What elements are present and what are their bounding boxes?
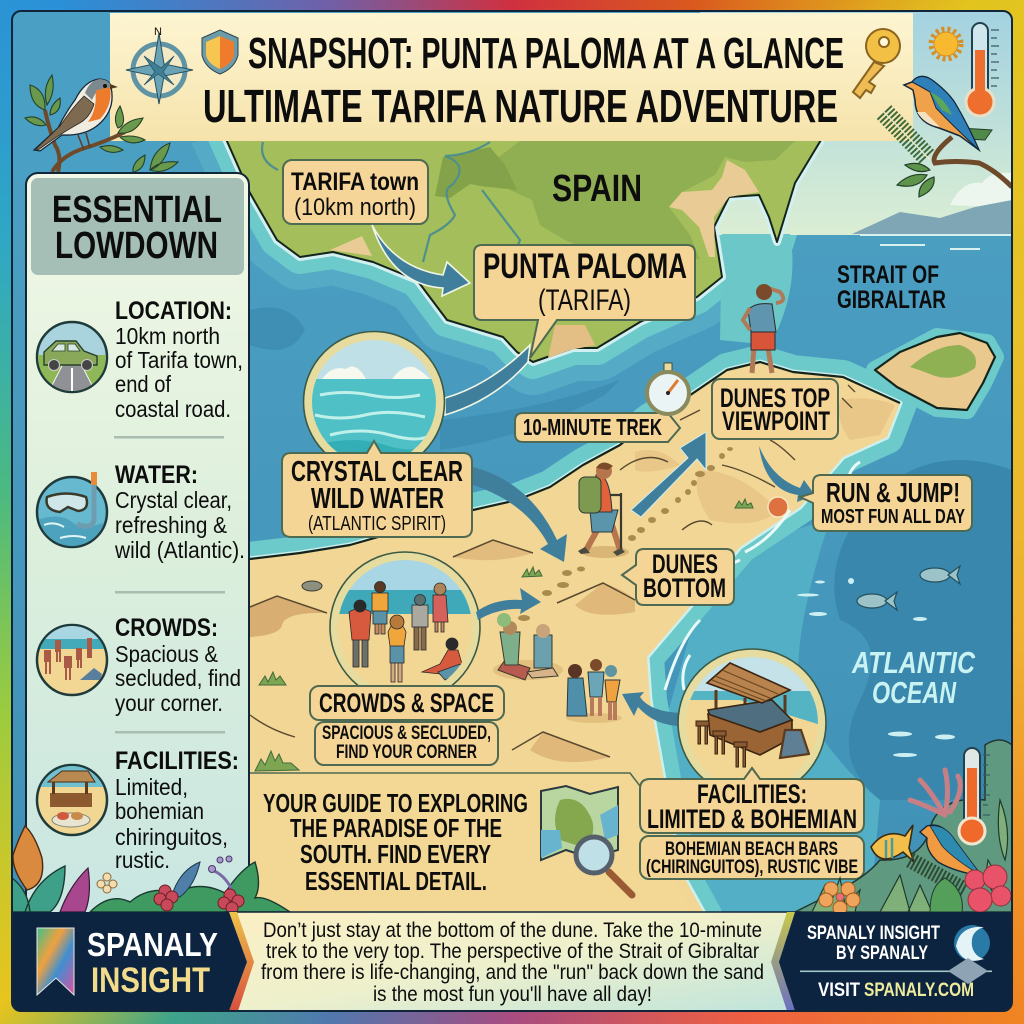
callout: dunes top viewpoint: DUNES TOP bbox=[720, 383, 830, 413]
chevron accent right bbox=[771, 912, 795, 1011]
robin head bbox=[85, 79, 111, 100]
water text: refreshing & bbox=[115, 512, 227, 538]
callout: run and jump: RUN & JUMP! bbox=[826, 477, 960, 508]
callout: dunes top viewpoint: VIEWPOINT bbox=[722, 406, 830, 436]
bird head and wing bbox=[912, 76, 979, 150]
green shrubs bbox=[90, 862, 290, 912]
crowds text: your corner. bbox=[115, 690, 223, 716]
big leaves bbox=[12, 866, 65, 912]
compass bbox=[126, 26, 193, 104]
callout: crystal clear wild water: WILD WATER bbox=[311, 483, 444, 515]
blue bird bbox=[920, 825, 982, 876]
guide box bbox=[250, 773, 690, 912]
callout: Punta Paloma: (TARIFA) bbox=[538, 284, 631, 317]
grass tufts bbox=[255, 499, 753, 771]
group of beach people bbox=[349, 582, 462, 682]
robin legs bbox=[78, 133, 90, 150]
branch right bbox=[934, 137, 1012, 187]
robin eye and beak bbox=[110, 84, 118, 89]
credit text: SPANALY.COM bbox=[864, 980, 974, 1001]
beach hut bbox=[696, 663, 809, 767]
bird wing green bbox=[930, 92, 952, 115]
SPAIN label: SPAIN bbox=[552, 168, 642, 210]
facilities text bbox=[115, 747, 239, 873]
small tan patch bbox=[330, 236, 372, 256]
leaves left bbox=[25, 75, 178, 172]
tip text bbox=[261, 919, 764, 1006]
open water swirl bbox=[440, 380, 620, 450]
Strait of Gibraltar island bbox=[875, 333, 995, 410]
icon: car on road bbox=[37, 322, 109, 395]
crowds item bbox=[37, 614, 241, 716]
callout: dunes bottom: DUNES bbox=[652, 549, 718, 579]
blue fern bbox=[172, 862, 200, 897]
panel heading bbox=[52, 189, 222, 267]
credit text: SPANALY INSIGHT bbox=[807, 923, 940, 944]
crowds text: secluded, find bbox=[115, 665, 241, 691]
callout: Tarifa town: (10km north) bbox=[294, 194, 416, 221]
water text: Crystal clear, bbox=[115, 487, 232, 513]
yellow fish bbox=[871, 825, 914, 862]
location item bbox=[37, 297, 243, 422]
tip text: trek to the very top. The perspective of the Strait of Gibraltar bbox=[266, 940, 759, 963]
tip text: from there is life-changing, and the "run" back down the sand bbox=[261, 961, 764, 984]
insight strip bbox=[12, 912, 1012, 1011]
sub callout: bohemian beach bars bbox=[640, 836, 864, 879]
Punta Paloma beach shore band bbox=[240, 362, 900, 915]
sub callout: bohemian beach bars: BOHEMIAN BEACH BARS bbox=[665, 839, 838, 860]
Strait of Gibraltar label: STRAIT OF bbox=[837, 261, 939, 289]
guide text: YOUR GUIDE TO EXPLORING bbox=[263, 788, 528, 818]
tip text: Don’t just stay at the bottom of the dune. Take the 10-minute bbox=[263, 919, 762, 942]
arrow: water to dunes bbox=[473, 467, 567, 562]
icon: map and magnifier bbox=[541, 786, 632, 895]
callout: crowds and space bbox=[310, 686, 504, 720]
water text: wild (Atlantic). bbox=[114, 537, 245, 563]
rivers bbox=[262, 142, 520, 262]
water text: WATER: bbox=[115, 461, 198, 489]
beach foam bbox=[240, 362, 900, 915]
hut roof bbox=[707, 663, 790, 703]
dune bottom ridge bbox=[512, 732, 610, 757]
leaves right bbox=[897, 163, 934, 197]
crowds circle bbox=[330, 552, 480, 702]
callout: dunes bottom bbox=[622, 549, 734, 605]
water sparkles bbox=[797, 578, 955, 757]
sub callout: spacious and secluded: SPACIOUS & SECLUDED, bbox=[322, 723, 491, 744]
surf lines bbox=[665, 462, 860, 690]
ginger plant bbox=[13, 826, 43, 890]
island shore bbox=[875, 337, 995, 410]
header banner bbox=[110, 13, 913, 141]
sitting people bbox=[493, 613, 563, 680]
arrow: run and jump bbox=[759, 446, 815, 502]
brand name: SPANALY bbox=[87, 926, 218, 963]
location text: of Tarifa town, bbox=[115, 347, 243, 373]
crowds text: Spacious & bbox=[115, 641, 218, 667]
ribbon logo bbox=[37, 928, 74, 995]
roof slats bbox=[712, 670, 778, 701]
guide text bbox=[263, 788, 528, 896]
icon: snorkel mask bbox=[37, 472, 110, 550]
water glow by beach bbox=[660, 520, 880, 912]
guide text: SOUTH. FIND EVERY bbox=[300, 839, 491, 869]
island land bbox=[875, 333, 995, 410]
bird left bbox=[25, 75, 178, 172]
dune center bbox=[453, 540, 533, 560]
beach bar circle bbox=[678, 649, 826, 797]
dark highland patch bbox=[435, 147, 517, 198]
hut counter front bbox=[708, 714, 792, 755]
credit panel right bbox=[779, 912, 1012, 1011]
guide text: THE PARADISE OF THE bbox=[290, 813, 502, 843]
callout: crystal clear wild water: (ATLANTIC SPIRIT) bbox=[308, 513, 446, 535]
dark fern bbox=[910, 860, 965, 890]
panel heading: LOWDOWN bbox=[55, 225, 218, 267]
chalk sign bbox=[780, 730, 809, 758]
location text: 10km north bbox=[115, 323, 220, 349]
facilities text: Limited, bbox=[115, 774, 188, 800]
green mound bbox=[795, 740, 1012, 912]
top left blue corner bbox=[12, 11, 112, 181]
brand name bbox=[87, 926, 218, 1000]
facilities text: chiringuitos, bbox=[115, 824, 228, 850]
stools bbox=[696, 721, 747, 767]
horizon foam bbox=[860, 235, 1012, 249]
compass: N bbox=[154, 26, 162, 38]
callout: Punta Paloma: PUNTA PALOMA bbox=[483, 247, 687, 286]
chevron accent left bbox=[229, 912, 254, 1011]
credit text: BY SPANALY bbox=[836, 943, 928, 964]
facilities text: FACILITIES: bbox=[115, 747, 239, 775]
panel body bbox=[26, 173, 249, 918]
tip text: is the most fun you'll have all day! bbox=[373, 983, 652, 1006]
callout: dunes top viewpoint bbox=[712, 379, 838, 439]
key icon bbox=[853, 29, 900, 98]
facilities text: rustic. bbox=[115, 847, 170, 873]
Spain wide water tone bbox=[222, 130, 722, 362]
title bbox=[203, 29, 844, 132]
Spain land shore band bbox=[222, 130, 827, 362]
robin breast bbox=[88, 87, 111, 122]
arrow: trek up bbox=[631, 432, 706, 517]
water text bbox=[114, 461, 245, 563]
dune bottom bbox=[530, 732, 610, 762]
facilities text: bohemian bbox=[115, 798, 204, 824]
callout: run and jump bbox=[800, 475, 972, 531]
bird body bbox=[904, 76, 979, 150]
dark coastline on north side of beach bbox=[250, 362, 900, 559]
callout: facilities bbox=[640, 768, 864, 834]
10-minute trek label: 10-MINUTE TREK bbox=[523, 414, 662, 440]
icon: stopwatch bbox=[647, 363, 689, 414]
dune center ridge bbox=[453, 540, 533, 557]
lilac buds bbox=[208, 856, 232, 872]
panel header box bbox=[31, 178, 244, 275]
foliage: bottom left bbox=[12, 826, 290, 914]
green leaf bbox=[930, 878, 962, 912]
standing people group bbox=[566, 659, 622, 723]
water item bbox=[37, 461, 245, 563]
guide text: ESSENTIAL DETAIL. bbox=[305, 866, 487, 896]
bird belly bbox=[917, 112, 940, 127]
callout: Punta Paloma bbox=[474, 245, 695, 358]
dune left bbox=[250, 596, 327, 637]
arrow: crowds to beach bbox=[476, 588, 541, 620]
Atlantic Ocean label: ATLANTIC bbox=[851, 645, 975, 680]
island greenery bbox=[910, 345, 976, 378]
purple leaf bbox=[60, 868, 89, 912]
orange marker bbox=[768, 497, 788, 517]
hut posts bbox=[716, 690, 785, 745]
brand name: INSIGHT bbox=[91, 961, 210, 1000]
fern leaves bbox=[812, 800, 1008, 912]
panel heading: ESSENTIAL bbox=[52, 189, 222, 231]
sub callout: spacious and secluded: FIND YOUR CORNER bbox=[336, 742, 477, 763]
arrow: Tarifa to Punta Paloma bbox=[372, 225, 470, 296]
sub callout: bohemian beach bars: (CHIRINGUITOS), RUSTIC VIBE bbox=[646, 857, 858, 878]
icon: beach bar bbox=[37, 765, 109, 835]
credit text: VISIT bbox=[818, 980, 860, 1001]
arrow: circle to Punta Paloma bbox=[445, 345, 530, 415]
dune bottom label ridge bbox=[557, 583, 635, 603]
soft sand shading bbox=[635, 398, 895, 523]
pebble bbox=[302, 581, 322, 591]
Atlantic Ocean label bbox=[851, 645, 975, 710]
deep patch left bbox=[250, 308, 305, 350]
bird wing bottom bbox=[930, 826, 982, 876]
icon: beach crowd bbox=[37, 625, 109, 695]
credit text bbox=[807, 923, 974, 1001]
crowds text bbox=[115, 614, 241, 716]
thermometer top bbox=[966, 23, 999, 116]
deep water patches bbox=[834, 460, 1012, 800]
dune left ridge bbox=[250, 596, 327, 613]
guide box top edge bbox=[250, 773, 640, 786]
hut counter top bbox=[708, 700, 792, 732]
fish 1 bbox=[920, 566, 960, 584]
footprints trail bbox=[518, 447, 733, 621]
pink flowers bbox=[154, 885, 244, 914]
robin eye bbox=[103, 84, 107, 88]
fern bbox=[882, 110, 930, 160]
sun icon bbox=[931, 29, 961, 59]
Strait of Gibraltar label: GIBRALTAR bbox=[837, 286, 946, 314]
pink hibiscus bbox=[965, 865, 1011, 912]
location text: end of bbox=[115, 371, 172, 397]
near-shore water below horizon bbox=[720, 234, 792, 345]
Atlantic Ocean label: OCEAN bbox=[872, 675, 956, 710]
Spain land bbox=[222, 130, 827, 362]
robin body bbox=[34, 79, 112, 151]
crowds text: CROWDS: bbox=[115, 614, 218, 642]
callout: run and jump: MOST FUN ALL DAY bbox=[821, 506, 965, 528]
person on top of dune bbox=[743, 284, 783, 373]
orange flower bbox=[819, 882, 860, 915]
lilac sprig bbox=[212, 870, 232, 890]
sky and horizon bbox=[700, 11, 1012, 235]
pale flower bbox=[97, 873, 117, 893]
dune near bottom label bbox=[575, 583, 635, 615]
heading: crowds and space: CROWDS & SPACE bbox=[319, 688, 494, 718]
facilities item bbox=[37, 747, 239, 873]
callout: crystal clear wild water: CRYSTAL CLEAR bbox=[291, 456, 463, 488]
distant mountains bbox=[852, 200, 1012, 234]
callout: crystal clear wild water bbox=[282, 441, 472, 537]
wave logo bbox=[948, 925, 990, 984]
distant cloud bbox=[950, 173, 1012, 208]
arrow: bar to group bbox=[622, 692, 682, 726]
location text: LOCATION: bbox=[115, 297, 232, 325]
tan patch by tail bbox=[548, 325, 595, 358]
dune lines bbox=[250, 385, 855, 737]
bird right bbox=[882, 76, 1012, 197]
branch left bbox=[45, 110, 125, 172]
callout: Tarifa town: TARIFA town bbox=[291, 168, 419, 196]
separator bbox=[800, 970, 992, 972]
thermometer bottom bbox=[959, 748, 990, 844]
location text bbox=[115, 297, 243, 422]
tip panel bbox=[225, 912, 800, 1011]
tan lowlands bbox=[669, 160, 759, 257]
Spain land foam bbox=[222, 130, 827, 362]
green highlands bbox=[495, 141, 795, 260]
crystal water circle bbox=[304, 332, 444, 472]
panel: essential lowdown bbox=[26, 173, 249, 918]
sprig behind bird bbox=[960, 128, 992, 140]
brand panel left bbox=[12, 912, 247, 1011]
shield icon bbox=[202, 30, 238, 74]
beach sand bbox=[240, 362, 900, 915]
callout: facilities: FACILITIES: bbox=[697, 779, 807, 809]
sub callout: spacious and secluded bbox=[315, 722, 498, 765]
Strait of Gibraltar label bbox=[837, 261, 946, 314]
location text: coastal road. bbox=[115, 396, 231, 422]
coral bbox=[910, 770, 960, 815]
callout: facilities: LIMITED & BOHEMIAN bbox=[647, 804, 857, 834]
robin wing bbox=[36, 96, 94, 150]
hiker bbox=[578, 462, 629, 558]
callout: dunes bottom: BOTTOM bbox=[643, 573, 726, 603]
fish 2 bbox=[857, 592, 897, 610]
callout: Tarifa town bbox=[283, 160, 428, 224]
foliage: bottom right bbox=[795, 740, 1012, 915]
